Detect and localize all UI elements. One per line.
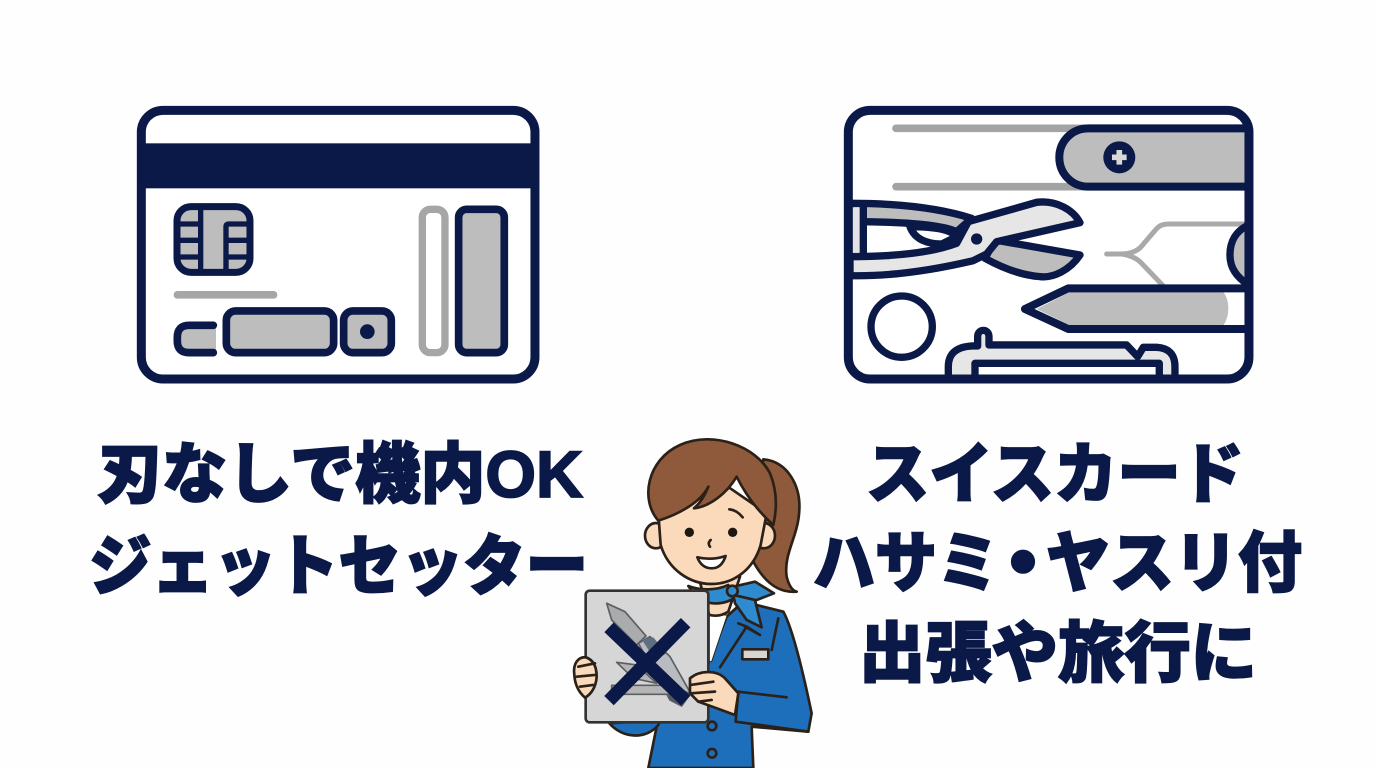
- hair: [648, 439, 776, 525]
- signature line: [174, 291, 277, 299]
- heading: right caption: ハサミ: [813, 526, 999, 600]
- ponytail: [753, 459, 799, 592]
- gray vertical slot: [422, 209, 445, 353]
- panel: swiss card tools icon: [848, 110, 1249, 380]
- right sleeve: [736, 692, 808, 732]
- navy vertical slot: [459, 209, 504, 353]
- scissors: [850, 202, 1080, 277]
- card background: [848, 110, 1249, 379]
- heading: left caption: [89, 437, 588, 603]
- ring: [871, 296, 932, 357]
- heading: left caption: ジェットセッター: [89, 529, 588, 603]
- character: flight attendant holding sign: [574, 439, 812, 768]
- heading: right caption: ・: [983, 520, 1063, 609]
- back hand: [574, 657, 597, 698]
- gray guide lines: [896, 128, 1087, 187]
- neck: [698, 577, 740, 616]
- buttons: [708, 722, 716, 730]
- bottom tool: [948, 330, 1175, 380]
- name badge: [742, 649, 768, 659]
- heading: right caption: スイスカード: [866, 437, 1244, 511]
- panel: blade-free card icon: [141, 110, 535, 379]
- knife handle: [1059, 128, 1248, 187]
- crossed out knife: [607, 603, 691, 706]
- scarf band: [688, 585, 734, 603]
- heading: left caption: 刃なしで機内OK: [97, 437, 583, 511]
- card outline: [848, 110, 1249, 379]
- heading: right caption: ヤスリ付: [1046, 526, 1302, 600]
- front hand: [690, 672, 738, 715]
- nail file: [1037, 292, 1228, 325]
- tweezer cap: [1230, 225, 1248, 285]
- square slot with dot: [344, 311, 391, 353]
- heading: right caption: 出張や旅行に: [859, 616, 1257, 690]
- lapel: [720, 623, 760, 667]
- magnetic stripe: [141, 143, 535, 188]
- ears: [645, 523, 667, 548]
- left sleeve: [609, 720, 660, 736]
- face details: [685, 509, 743, 568]
- heading: right caption: [813, 437, 1302, 690]
- small tab slot: [177, 325, 216, 353]
- sign board: [586, 591, 708, 722]
- shirt: [709, 615, 727, 662]
- navy X mark: [609, 623, 686, 701]
- icon: IC chip: [177, 207, 250, 272]
- long slot: [226, 311, 334, 353]
- icon: swiss cross badge: [1103, 141, 1135, 173]
- face: [658, 477, 767, 584]
- tweezers: [1107, 224, 1248, 287]
- scarf wings: [727, 582, 774, 627]
- card outline: [141, 110, 535, 379]
- jacket: [648, 602, 812, 768]
